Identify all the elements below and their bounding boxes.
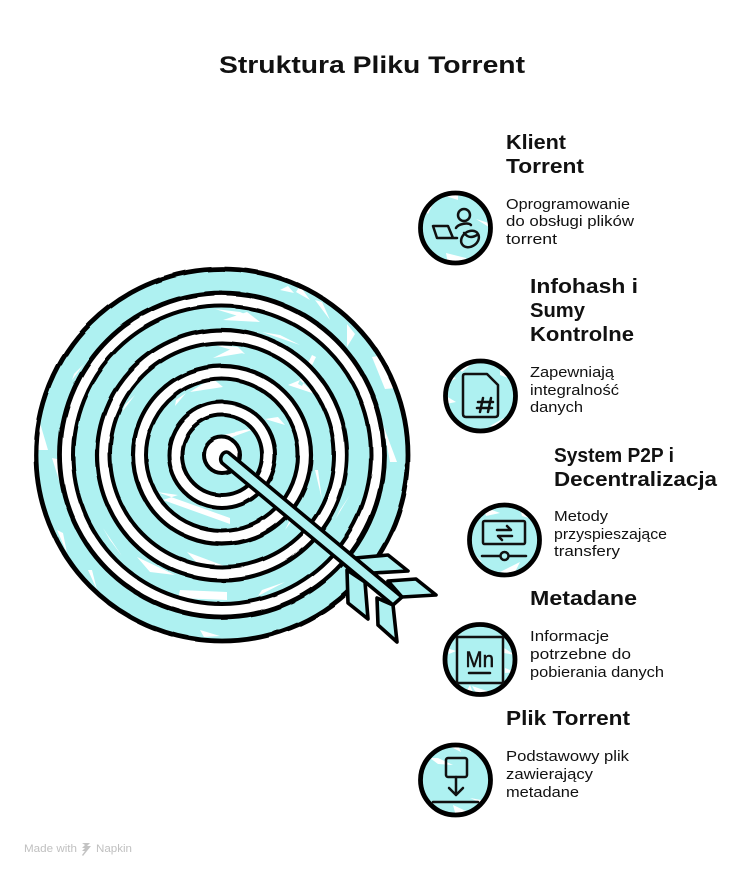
description: Metody — [554, 508, 609, 525]
arrow — [221, 452, 436, 642]
heading: System P2P i — [554, 445, 674, 467]
heading: Metadane — [530, 588, 637, 610]
heading: Torrent — [506, 156, 584, 178]
heading: Infohash i — [530, 276, 638, 298]
heading — [530, 276, 638, 346]
description — [530, 364, 620, 416]
icon: download — [420, 744, 492, 816]
item: Klient Torrent — [420, 132, 634, 265]
target chart — [36, 269, 408, 641]
arrow fletching — [347, 555, 436, 642]
description: pobierania danych — [530, 664, 664, 681]
footer: made with Napkin: Napkin — [96, 843, 132, 855]
icon: screen with transfer arrows — [468, 504, 540, 576]
item: Infohash i Sumy Kontrolne — [444, 276, 638, 432]
item: Metadane — [444, 588, 664, 696]
arrow shaft — [221, 452, 402, 605]
description: danych — [530, 399, 583, 416]
description: integralność — [530, 382, 620, 399]
heading: Plik Torrent — [506, 708, 630, 730]
description: Podstawowy plik — [506, 748, 630, 765]
description: Zapewniają — [530, 364, 615, 381]
icon: file with hash — [444, 360, 516, 432]
description — [506, 196, 634, 248]
footer: made with Napkin: Made with — [24, 843, 77, 855]
description: torrent — [506, 231, 558, 248]
description: metadane — [506, 784, 579, 801]
icon: metadata square: Mn — [466, 647, 494, 672]
heading — [506, 132, 584, 178]
icon: Napkin logo — [82, 843, 91, 856]
description — [530, 628, 664, 681]
heading: Sumy — [530, 300, 586, 322]
icon: metadata square — [444, 624, 516, 696]
heading: Klient — [506, 132, 566, 154]
description: do obsługi plików — [506, 213, 634, 230]
title: Struktura Pliku Torrent — [219, 52, 525, 79]
icon: users and laptop — [420, 192, 492, 265]
footer: made with Napkin — [24, 843, 132, 856]
description — [554, 508, 667, 560]
item: System P2P i Decentralizacja — [468, 445, 718, 576]
description: Informacje — [530, 628, 609, 645]
heading: Kontrolne — [530, 324, 634, 346]
target rings — [36, 269, 408, 641]
item: Plik Torrent — [420, 708, 630, 816]
heading: Decentralizacja — [554, 469, 718, 491]
description: potrzebne do — [530, 646, 631, 663]
heading — [554, 445, 718, 491]
description: transfery — [554, 543, 621, 560]
description: przyspieszające — [554, 526, 667, 543]
description: zawierający — [506, 766, 594, 783]
description — [506, 748, 630, 801]
description: Oprogramowanie — [506, 196, 630, 213]
